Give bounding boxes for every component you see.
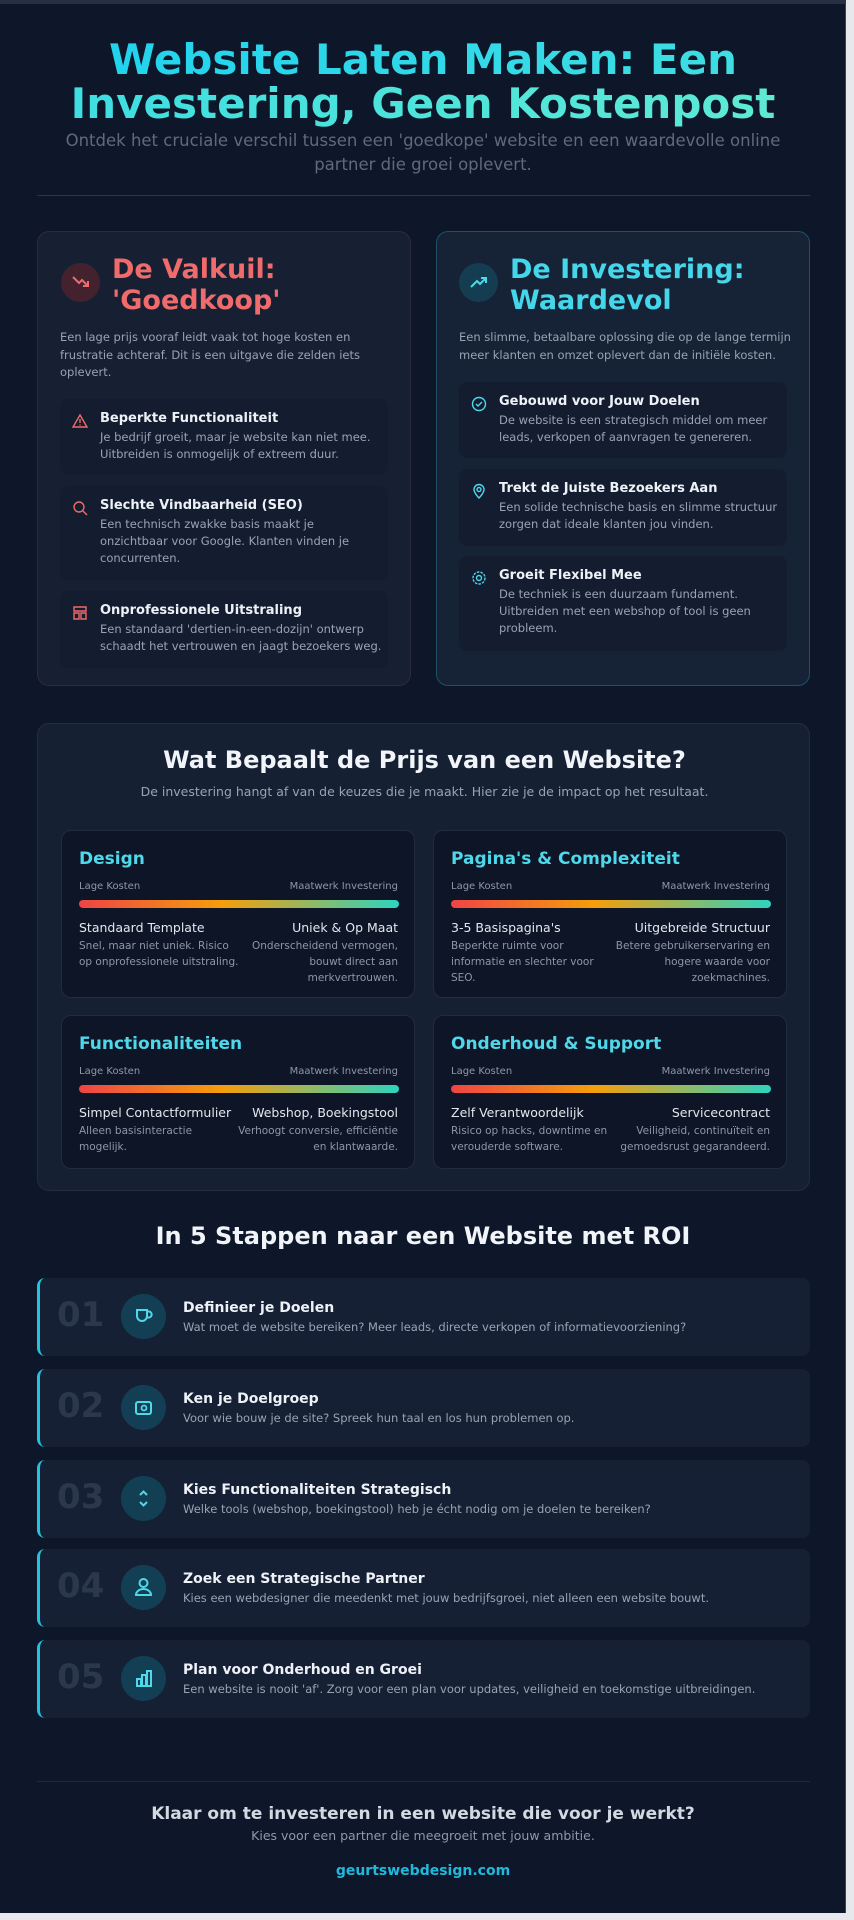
step 5: Een website is nooit 'af'. Zorg voor een plan voor updates, veiligheid en toekomstige uitbreidingen. [183, 1682, 755, 1696]
item 1: Je bedrijf groeit, maar je website kan niet mee. Uitbreiden is onmogelijk of extreem duur. [100, 430, 371, 461]
item 2: Een solide technische basis en slimme structuur zorgen dat ideale klanten jou vinden. [499, 500, 777, 531]
heading: Waardevol [510, 285, 672, 316]
card: design: Uniek & Op Maat [292, 920, 398, 935]
step 1: 01 [57, 1295, 104, 1335]
panel: valkuil [37, 231, 411, 686]
card: onderhoud: Onderhoud & Support [451, 1034, 661, 1054]
description: Een lage prijs vooraf leidt vaak tot hoge kosten en frustratie achteraf. Dit is een uitgave die zelden iets oplevert. [60, 330, 360, 379]
heading: stappen: In 5 Stappen naar een Website met ROI [156, 1222, 690, 1250]
step 5: 05 [57, 1657, 104, 1697]
card: onderhoud: Lage Kosten [451, 1066, 512, 1077]
footer cta: Klaar om te investeren in een website die voor je werkt? [151, 1804, 695, 1824]
footer cta: Kies voor een partner die meegroeit met jouw ambitie. [251, 1828, 595, 1843]
step 2 [37, 1369, 810, 1447]
card: functionaliteiten: Webshop, Boekingstool [252, 1105, 398, 1120]
card: design: Standaard Template [79, 920, 205, 935]
description: Een slimme, betaalbare oplossing die op de lange termijn meer klanten en omzet oplevert dan de initiële kosten. [459, 330, 791, 362]
footer cta: geurtswebdesign.com [336, 1863, 510, 1879]
item 2 [60, 486, 388, 580]
step 3 [37, 1460, 810, 1538]
step 1: Definieer je Doelen [183, 1300, 334, 1316]
card: paginas: Beperkte ruimte voor informatie en slechter voor SEO. [451, 940, 594, 984]
step 4: 04 [57, 1566, 104, 1606]
card: design: Snel, maar niet uniek. Risico op onprofessionele uitstraling. [79, 940, 238, 968]
card: design: Design [79, 849, 145, 869]
step 2: 02 [57, 1386, 104, 1426]
card: design [61, 830, 415, 998]
panel: prijs [37, 723, 810, 1191]
card: paginas: Uitgebreide Structuur [635, 920, 770, 935]
step 1: Wat moet de website bereiken? Meer leads, directe verkopen of informatievoorziening? [183, 1320, 686, 1334]
step 5 [37, 1640, 810, 1718]
step 3: Kies Functionaliteiten Strategisch [183, 1482, 451, 1498]
card: onderhoud: Veiligheid, continuïteit en gemoedsrust gegarandeerd. [620, 1125, 770, 1153]
card: functionaliteiten [61, 1015, 415, 1169]
card: design: Onderscheidend vermogen, bouwt direct aan merkvertrouwen. [252, 940, 398, 984]
step 5: Plan voor Onderhoud en Groei [183, 1662, 422, 1678]
card: design: Lage Kosten [79, 881, 140, 892]
card: onderhoud: Servicecontract [672, 1105, 770, 1120]
title: Website Laten Maken: Een [109, 35, 737, 84]
item 2 [459, 469, 787, 546]
item 1: Gebouwd voor Jouw Doelen [499, 394, 700, 409]
heading: De Valkuil: [112, 254, 276, 285]
footer cta [151, 1804, 695, 1879]
panel: investering [436, 231, 810, 686]
card: functionaliteiten: Lage Kosten [79, 1066, 140, 1077]
step 3: Welke tools (webshop, boekingstool) heb je écht nodig om je doelen te bereiken? [183, 1502, 651, 1516]
card: functionaliteiten: Functionaliteiten [79, 1034, 242, 1054]
card: paginas: Betere gebruikerservaring en hogere waarde voor zoekmachines. [616, 940, 770, 984]
step 2: Ken je Doelgroep [183, 1391, 319, 1407]
item 3 [459, 556, 787, 651]
subtitle: De investering hangt af van de keuzes die je maakt. Hier zie je de impact op het resultaat. [141, 784, 708, 799]
step 4 [37, 1549, 810, 1627]
heading [510, 254, 745, 316]
card: functionaliteiten: Alleen basisinteractie mogelijk. [79, 1125, 192, 1153]
title: Investering, Geen Kostenpost [71, 79, 775, 128]
item 1: Beperkte Functionaliteit [100, 411, 278, 426]
item 2: Trekt de Juiste Bezoekers Aan [499, 481, 717, 496]
item 1 [459, 382, 787, 458]
step 4: Kies een webdesigner die meedenkt met jouw bedrijfsgroei, niet alleen een website bouwt. [183, 1591, 709, 1605]
item 3: De techniek is een duurzaam fundament. Uitbreiden met een webshop of tool is geen probleem. [499, 587, 751, 635]
item 3: Groeit Flexibel Mee [499, 568, 642, 583]
card: functionaliteiten: Maatwerk Investering [290, 1066, 398, 1077]
card: paginas: 3-5 Basispagina's [451, 920, 561, 935]
icon: trend down [61, 263, 100, 302]
card: onderhoud: Maatwerk Investering [662, 1066, 770, 1077]
card: design: Maatwerk Investering [290, 881, 398, 892]
step 4: Zoek een Strategische Partner [183, 1571, 425, 1587]
item 3 [60, 591, 388, 668]
item 3: Een standaard 'dertien-in-een-dozijn' ontwerp schaadt het vertrouwen en jaagt bezoekers weg. [100, 622, 381, 653]
title [71, 35, 775, 128]
heading [112, 254, 281, 316]
heading: Wat Bepaalt de Prijs van een Website? [163, 746, 686, 774]
card: paginas: Pagina's & Complexiteit [451, 849, 680, 869]
item 3: Onprofessionele Uitstraling [100, 603, 302, 618]
step 1 [37, 1278, 810, 1356]
item 2: Slechte Vindbaarheid (SEO) [100, 498, 303, 513]
item 1 [60, 399, 388, 475]
item 1: De website is een strategisch middel om meer leads, verkopen of aanvragen te genereren. [499, 413, 767, 444]
card: paginas: Lage Kosten [451, 881, 512, 892]
card: paginas [433, 830, 787, 998]
step 3: 03 [57, 1477, 104, 1517]
subtitle: Ontdek het cruciale verschil tussen een 'goedkope' website en een waardevolle online partner die groei oplevert. [66, 131, 780, 174]
card: onderhoud [433, 1015, 787, 1169]
heading: De Investering: [510, 254, 745, 285]
icon: trend up [459, 263, 498, 302]
step 2: Voor wie bouw je de site? Spreek hun taal en los hun problemen op. [183, 1411, 574, 1425]
card: paginas: Maatwerk Investering [662, 881, 770, 892]
card: functionaliteiten: Verhoogt conversie, efficiëntie en klantwaarde. [238, 1125, 398, 1153]
card: functionaliteiten: Simpel Contactformulier [79, 1105, 231, 1120]
item 2: Een technisch zwakke basis maakt je onzichtbaar voor Google. Klanten vinden je concurrenten. [100, 517, 349, 565]
heading: 'Goedkoop' [112, 285, 281, 316]
card: onderhoud: Risico op hacks, downtime en verouderde software. [451, 1125, 607, 1153]
card: onderhoud: Zelf Verantwoordelijk [451, 1105, 584, 1120]
